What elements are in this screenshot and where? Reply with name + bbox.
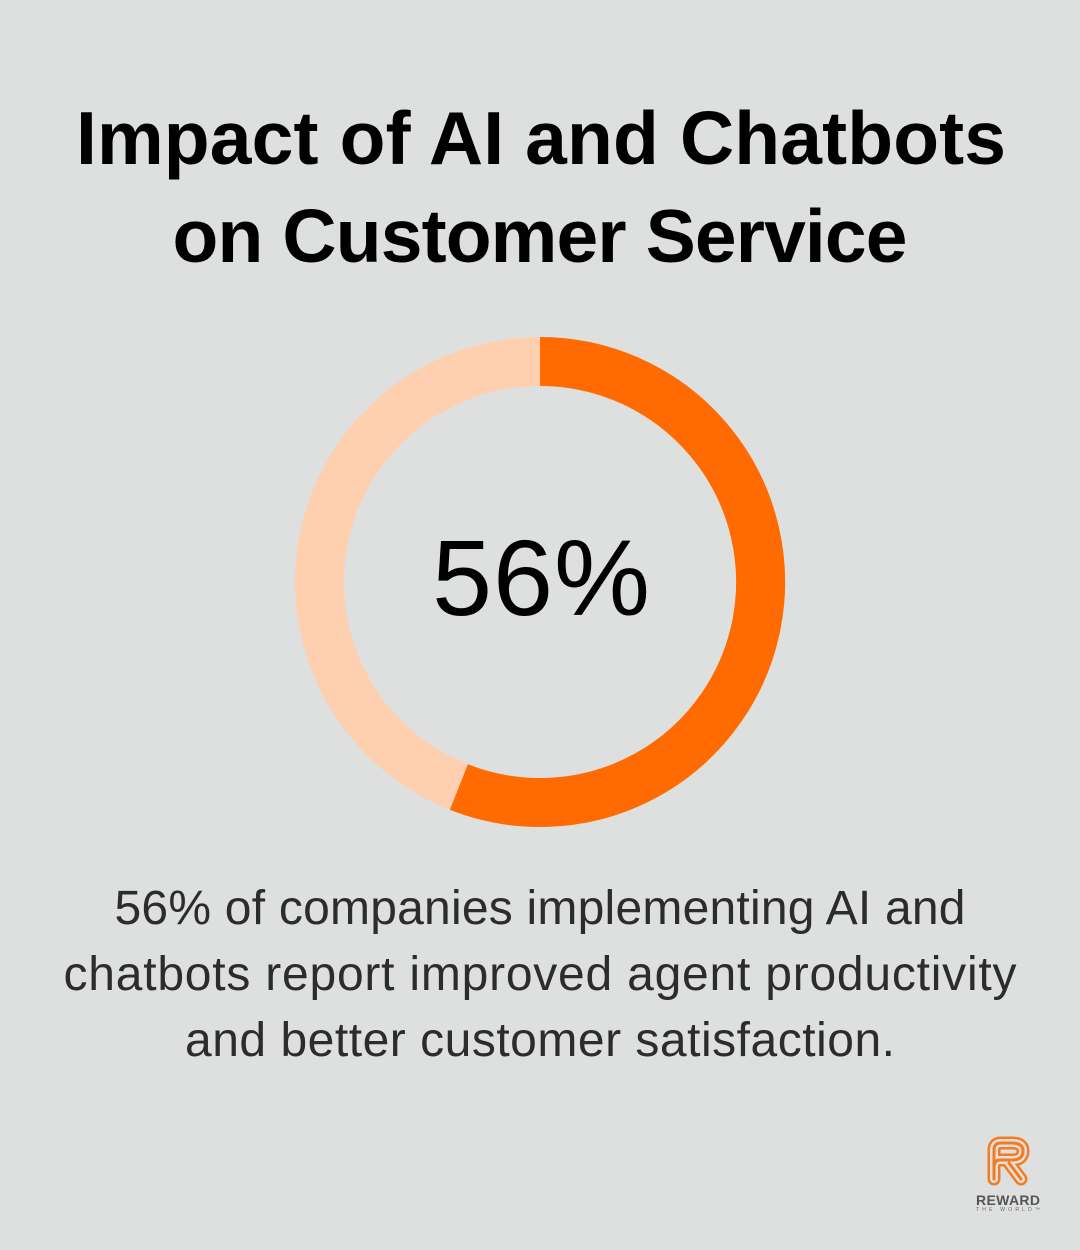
donut value: 56% [432, 517, 650, 638]
title [76, 96, 1006, 278]
donut chart [320, 362, 761, 802]
description: and better customer satisfaction. [185, 1014, 895, 1067]
title: Impact of AI and Chatbots [76, 96, 1006, 180]
logo wordmark: REWARD [976, 1192, 1040, 1208]
title: on Customer Service [172, 194, 908, 278]
icon: R mark [994, 1143, 1023, 1179]
description [64, 882, 1016, 1067]
logo: Reward the World [976, 1143, 1040, 1213]
logo tagline: THE WORLD™ [976, 1207, 1040, 1213]
description: chatbots report improved agent productivity [64, 948, 1016, 1001]
description: 56% of companies implementing AI and [114, 882, 966, 935]
